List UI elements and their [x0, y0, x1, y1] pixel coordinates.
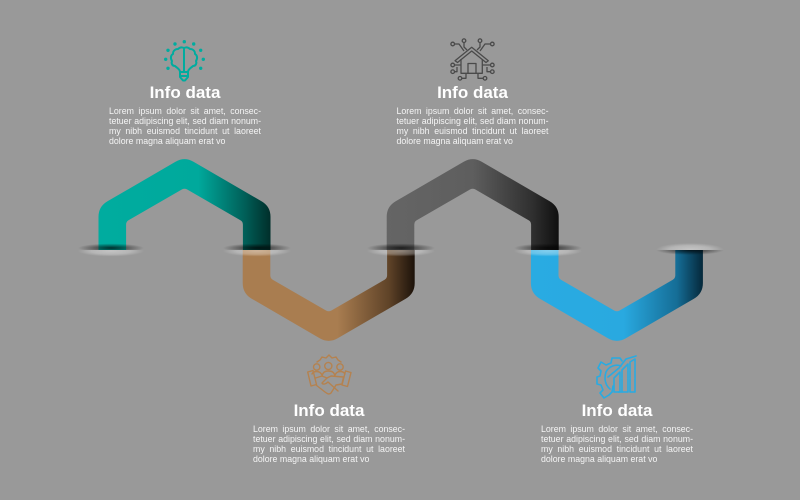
- panel: info block 1: [109, 83, 261, 146]
- text block 2: tetuer adipiscing elit, sed diam nonum-: [396, 116, 548, 126]
- teal arch segment: [98, 159, 270, 250]
- text block 2: my nibh euismod tincidunt ut laoreet: [396, 126, 548, 136]
- text block 3: my nibh euismod tincidunt ut laoreet: [253, 444, 405, 454]
- wave chart: [80, 38, 722, 399]
- icon: lightbulb brain: [165, 41, 204, 80]
- panel: info block 2: [396, 83, 548, 146]
- text block 3: Lorem ipsum dolor sit amet, consec-: [253, 424, 405, 434]
- text block 3: dolore magna aliquam erat vo: [253, 454, 369, 464]
- text block 1: Lorem ipsum dolor sit amet, consec-: [109, 106, 261, 116]
- text block 3: [253, 424, 405, 464]
- panel: info block 4: [541, 401, 693, 464]
- text block 2: [396, 106, 548, 146]
- gray arch segment: [387, 159, 559, 250]
- junction shadow 3: [370, 244, 432, 256]
- icon: gear with growth chart: [597, 356, 636, 398]
- text block 4: Lorem ipsum dolor sit amet, consec-: [541, 424, 693, 434]
- icon: smart home: [451, 39, 494, 80]
- junction shadow 1: [80, 244, 142, 256]
- text block 1: [109, 106, 261, 146]
- text block 4: my nibh euismod tincidunt ut laoreet: [541, 444, 693, 454]
- junction shadow 2: [226, 244, 288, 256]
- end cap shadow: [658, 244, 722, 254]
- text block 1: my nibh euismod tincidunt ut laoreet: [109, 126, 261, 136]
- heading 4: Info data: [582, 401, 652, 420]
- text block 1: tetuer adipiscing elit, sed diam nonum-: [109, 116, 261, 126]
- text block 4: [541, 424, 693, 464]
- panel: info block 3: [253, 401, 405, 464]
- icon: team handshake: [308, 355, 351, 394]
- text block 4: dolore magna aliquam erat vo: [541, 454, 657, 464]
- text block 2: Lorem ipsum dolor sit amet, consec-: [396, 106, 548, 116]
- text block 2: dolore magna aliquam erat vo: [396, 136, 513, 146]
- heading 3: Info data: [294, 401, 364, 420]
- heading 1: Info data: [150, 83, 220, 102]
- junction shadow 4: [516, 244, 580, 256]
- text block 4: tetuer adipiscing elit, sed diam nonum-: [541, 434, 693, 444]
- brown valley segment: [243, 250, 415, 341]
- blue valley segment: [531, 250, 703, 341]
- heading 2: Info data: [437, 83, 508, 102]
- text block 3: tetuer adipiscing elit, sed diam nonum-: [253, 434, 405, 444]
- text block 1: dolore magna aliquam erat vo: [109, 136, 225, 146]
